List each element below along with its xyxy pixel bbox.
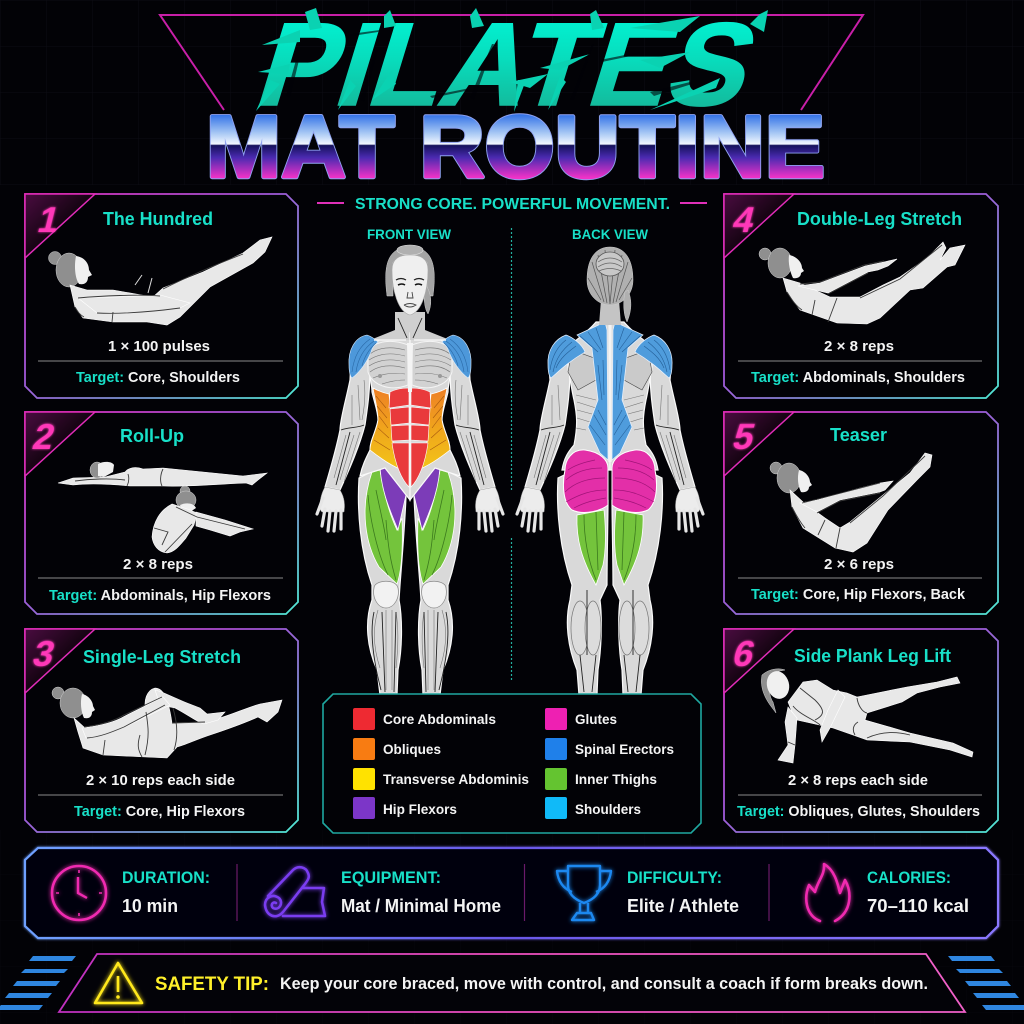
title — [160, 0, 863, 196]
difficulty — [627, 868, 739, 916]
number badge 3: 3 — [29, 634, 59, 674]
reps: 1 × 100 pulses — [108, 338, 210, 355]
icon: trophy — [557, 866, 611, 920]
icon: flame — [806, 864, 849, 921]
legend: core abdominals: Core Abdominals — [383, 711, 496, 727]
legend: core abdominals — [353, 708, 496, 730]
equipment: Mat / Minimal Home — [341, 896, 501, 916]
heading: Double-Leg Stretch — [797, 209, 962, 229]
legend: glutes: Glutes — [575, 711, 617, 727]
number badge 4: 4 — [729, 200, 760, 240]
calories — [867, 868, 969, 916]
panel: exercise 1 the hundred — [25, 194, 298, 398]
front anatomy figure — [317, 245, 503, 695]
target: Target: Obliques, Glutes, Shoulders — [737, 803, 980, 820]
duration: 10 min — [122, 896, 178, 916]
legend: hip flexors — [353, 797, 457, 819]
calories: CALORIES: — [867, 868, 951, 887]
panel: exercise 4 double-leg stretch — [724, 194, 998, 398]
equipment — [341, 868, 501, 916]
target: Target: Core, Hip Flexors — [74, 803, 245, 820]
heading: Side Plank Leg Lift — [794, 646, 951, 666]
panel: exercise 6 side plank leg lift — [724, 629, 998, 832]
panel: exercise 5 teaser — [724, 412, 998, 614]
target: Target: Abdominals, Shoulders — [751, 369, 965, 386]
legend: inner thighs — [545, 768, 657, 790]
title frame — [160, 15, 863, 110]
difficulty: DIFFICULTY: — [627, 868, 722, 887]
safety label: SAFETY TIP: — [155, 974, 269, 995]
legend — [323, 694, 701, 833]
duration: DURATION: — [122, 868, 210, 887]
front view label: FRONT VIEW — [367, 226, 452, 242]
heading: The Hundred — [103, 209, 213, 229]
pose: single-leg stretch — [52, 687, 282, 758]
subtitle: STRONG CORE. POWERFUL MOVEMENT. — [355, 196, 670, 213]
safety text: Keep your core braced, move with control, and consult a coach if form breaks down. — [280, 975, 928, 993]
panel: exercise 2 roll-up — [25, 412, 298, 614]
legend: inner thighs: Inner Thighs — [575, 771, 657, 787]
equipment: EQUIPMENT: — [341, 868, 441, 887]
title: Pilates: PILATES — [244, 0, 773, 130]
legend: shoulders — [545, 797, 641, 819]
heading: Teaser — [830, 425, 887, 445]
pose: roll-up — [58, 462, 267, 553]
safety tip banner — [59, 954, 965, 1012]
number badge 6: 6 — [729, 634, 759, 674]
heading: Roll-Up — [120, 426, 184, 446]
title: Mat Routine: MAT ROUTINE — [206, 97, 825, 196]
duration — [122, 868, 210, 916]
number badge 4 — [724, 194, 794, 258]
stats bar — [25, 848, 998, 938]
panel: exercise 3 single-leg stretch — [25, 629, 298, 832]
icon: clock — [52, 866, 106, 920]
legend: obliques — [353, 738, 441, 760]
legend: transverse abdominis: Transverse Abdominis — [383, 771, 529, 787]
pose: double-leg stretch — [759, 242, 965, 324]
number badge 1: 1 — [34, 200, 64, 240]
reps: 2 × 8 reps — [824, 338, 894, 355]
back head with bun — [587, 247, 633, 325]
back anatomy figure — [517, 247, 703, 695]
target: Target: Core, Shoulders — [76, 369, 240, 386]
number badge 1 — [25, 194, 95, 258]
target: Target: Abdominals, Hip Flexors — [49, 587, 271, 604]
legend: spinal erectors — [545, 738, 674, 760]
number badge 2 — [25, 412, 95, 476]
target: Target: Core, Hip Flexors, Back — [751, 586, 966, 603]
number badge 3 — [25, 629, 95, 693]
decorative stripes left — [0, 956, 76, 1010]
legend: glutes — [545, 708, 617, 730]
heading: Single-Leg Stretch — [83, 647, 241, 667]
number badge 5: 5 — [729, 417, 759, 457]
icon: warning triangle — [95, 963, 142, 1003]
pose: teaser — [770, 453, 932, 552]
calories: 70–110 kcal — [867, 896, 969, 916]
number badge 6 — [724, 629, 794, 693]
legend: transverse abdominis — [353, 768, 529, 790]
reps: 2 × 10 reps each side — [86, 772, 235, 789]
number badge 5 — [724, 412, 794, 476]
difficulty: Elite / Athlete — [627, 896, 739, 916]
reps: 2 × 6 reps — [824, 556, 894, 573]
reps: 2 × 8 reps each side — [788, 772, 928, 789]
number badge 2: 2 — [29, 417, 59, 457]
pose: the hundred — [48, 237, 272, 325]
legend: spinal erectors: Spinal Erectors — [575, 741, 674, 757]
legend: obliques: Obliques — [383, 741, 441, 757]
icon: rolled mat — [265, 867, 325, 916]
legend: shoulders: Shoulders — [575, 801, 641, 817]
title: Mat Routine: MAT ROUTINE — [206, 97, 825, 196]
back view label: BACK VIEW — [572, 226, 649, 242]
legend: hip flexors: Hip Flexors — [383, 801, 457, 817]
decorative stripes right — [948, 956, 1024, 1010]
pose: side plank leg lift — [761, 669, 973, 763]
reps: 2 × 8 reps — [123, 556, 193, 573]
front head — [386, 245, 434, 315]
